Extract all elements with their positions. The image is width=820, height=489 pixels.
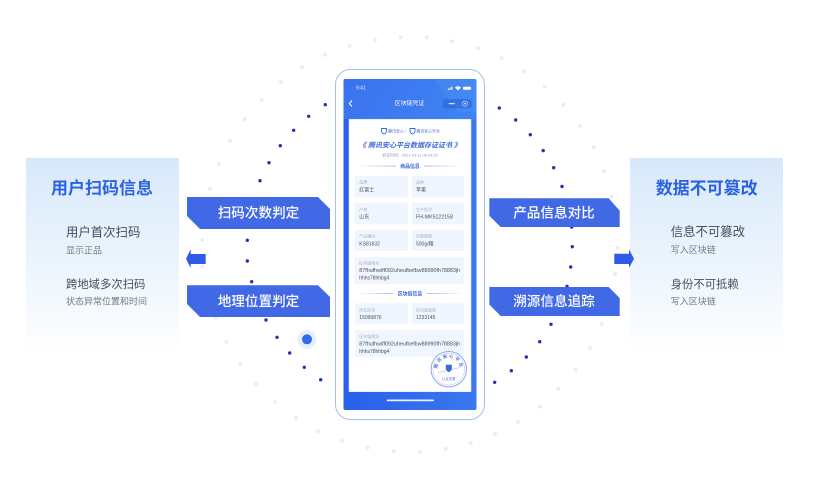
text block: identity non-repudiation — [671, 277, 739, 306]
heading: user scan info: 用户扫码信息 — [51, 178, 153, 198]
card: brand: 红富士 — [359, 186, 374, 194]
card: batch: FH-MK5122158 — [416, 214, 453, 220]
text block: information tamper-proof — [671, 224, 745, 255]
card: block number: 15099876 — [359, 315, 382, 321]
section heading: product info — [359, 163, 460, 170]
stamp — [430, 351, 467, 388]
card: block number — [355, 303, 408, 324]
card: product code — [355, 230, 408, 251]
card: blockchain address — [355, 257, 464, 284]
card: variety — [412, 176, 464, 197]
card: blockchain address 2: 区块链地址 — [359, 333, 379, 339]
phone screen — [344, 79, 476, 410]
highlighted blue node — [298, 330, 316, 349]
phone — [335, 69, 485, 420]
card: blockchain address 2: hhhs78hhbg4 — [359, 349, 390, 355]
section heading: blockchain info: 区块链信息 — [398, 290, 422, 297]
certificate logos: 腾讯安心 — [388, 128, 404, 134]
app header: 区块链凭证 — [395, 99, 424, 107]
banner: location check — [187, 285, 330, 317]
text block: identity non-repudiation: 身份不可抵赖 — [671, 277, 739, 291]
card: variety: 品种 — [416, 179, 424, 185]
banner: location check: 地理位置判定 — [218, 293, 300, 309]
section heading: blockchain info — [360, 290, 460, 297]
app header: 9:41 — [356, 86, 366, 92]
card: blockchain address: 区块链地址 — [359, 259, 379, 265]
dotted ring: light outer dots — [200, 35, 620, 454]
card: blockchain address 2 — [355, 330, 464, 357]
card: batch — [412, 203, 464, 224]
banner: product info comparison: 产品信息对比 — [513, 205, 595, 221]
certificate logos: 腾讯安心平台 — [416, 128, 440, 134]
text block: first scan — [66, 224, 140, 255]
card: product code: 产品编码 — [359, 233, 375, 239]
arrow: pointing left — [186, 249, 206, 268]
card: origin — [355, 203, 408, 224]
certificate timestamp: 验证时间：2021-03-11 08:34:25 — [382, 152, 438, 158]
text block: multi-region scan — [66, 277, 147, 306]
card: packaging: 500g/箱 — [416, 240, 434, 248]
certificate title: 《 腾讯安心平台数据存证证书 》 — [359, 140, 461, 150]
heading: data tamper-proof: 数据不可篡改 — [656, 178, 758, 198]
section heading: product info: 商品信息 — [400, 163, 420, 170]
app header — [344, 79, 476, 119]
panel: user scan info — [26, 158, 179, 358]
banner: scan count check: 扫码次数判定 — [218, 205, 300, 221]
card: blockchain address: 87fhufhwiff092uheufbefbw88990fh78883jh — [359, 268, 460, 274]
stamp: 腾讯安心平台 — [434, 354, 464, 369]
home indicator — [387, 400, 434, 401]
certificate — [348, 119, 472, 392]
banner: product info comparison — [489, 198, 620, 227]
banner: traceability tracking — [489, 287, 620, 316]
card: brand — [355, 176, 408, 197]
text block: multi-region scan: 跨地域多次扫码 — [66, 277, 145, 291]
card: product code: KS81632 — [359, 242, 380, 248]
card: block height — [412, 303, 464, 324]
card: packaging: 包装规格 — [416, 233, 432, 239]
arrow: pointing right — [614, 249, 634, 268]
stamp: 认证查看 — [442, 376, 456, 381]
text block: multi-region scan: 状态异常位置和时间 — [66, 296, 147, 306]
text block: first scan: 显示正品 — [66, 245, 102, 255]
banner: scan count check — [187, 197, 330, 229]
certificate logos — [382, 128, 440, 134]
card: brand: 品牌 — [359, 179, 367, 185]
card: packaging — [412, 230, 464, 251]
text block: identity non-repudiation: 写入区块链 — [671, 296, 716, 306]
card: origin: 产地 — [359, 206, 367, 212]
card: block number: 所在区块 — [359, 306, 375, 312]
card: block height: 1233145 — [416, 315, 436, 321]
card: block height: 区块链高度 — [416, 306, 436, 312]
text block: first scan: 用户首次扫码 — [66, 224, 140, 240]
card: blockchain address: hhhs78hhbg4 — [359, 275, 390, 281]
card: origin: 山东 — [359, 214, 369, 220]
panel: data tamper-proof — [630, 158, 783, 358]
card: variety: 苹果 — [416, 186, 426, 194]
card: blockchain address 2: 87fhufhwiff092uheufbefbw88990fh78883jh — [359, 342, 460, 348]
dotted ring: dark inner dots — [246, 103, 574, 384]
text block: information tamper-proof: 写入区块链 — [671, 244, 716, 255]
banner: traceability tracking: 溯源信息追踪 — [513, 293, 595, 309]
card: batch: 生产批次 — [416, 206, 432, 212]
text block: information tamper-proof: 信息不可篡改 — [671, 224, 745, 239]
